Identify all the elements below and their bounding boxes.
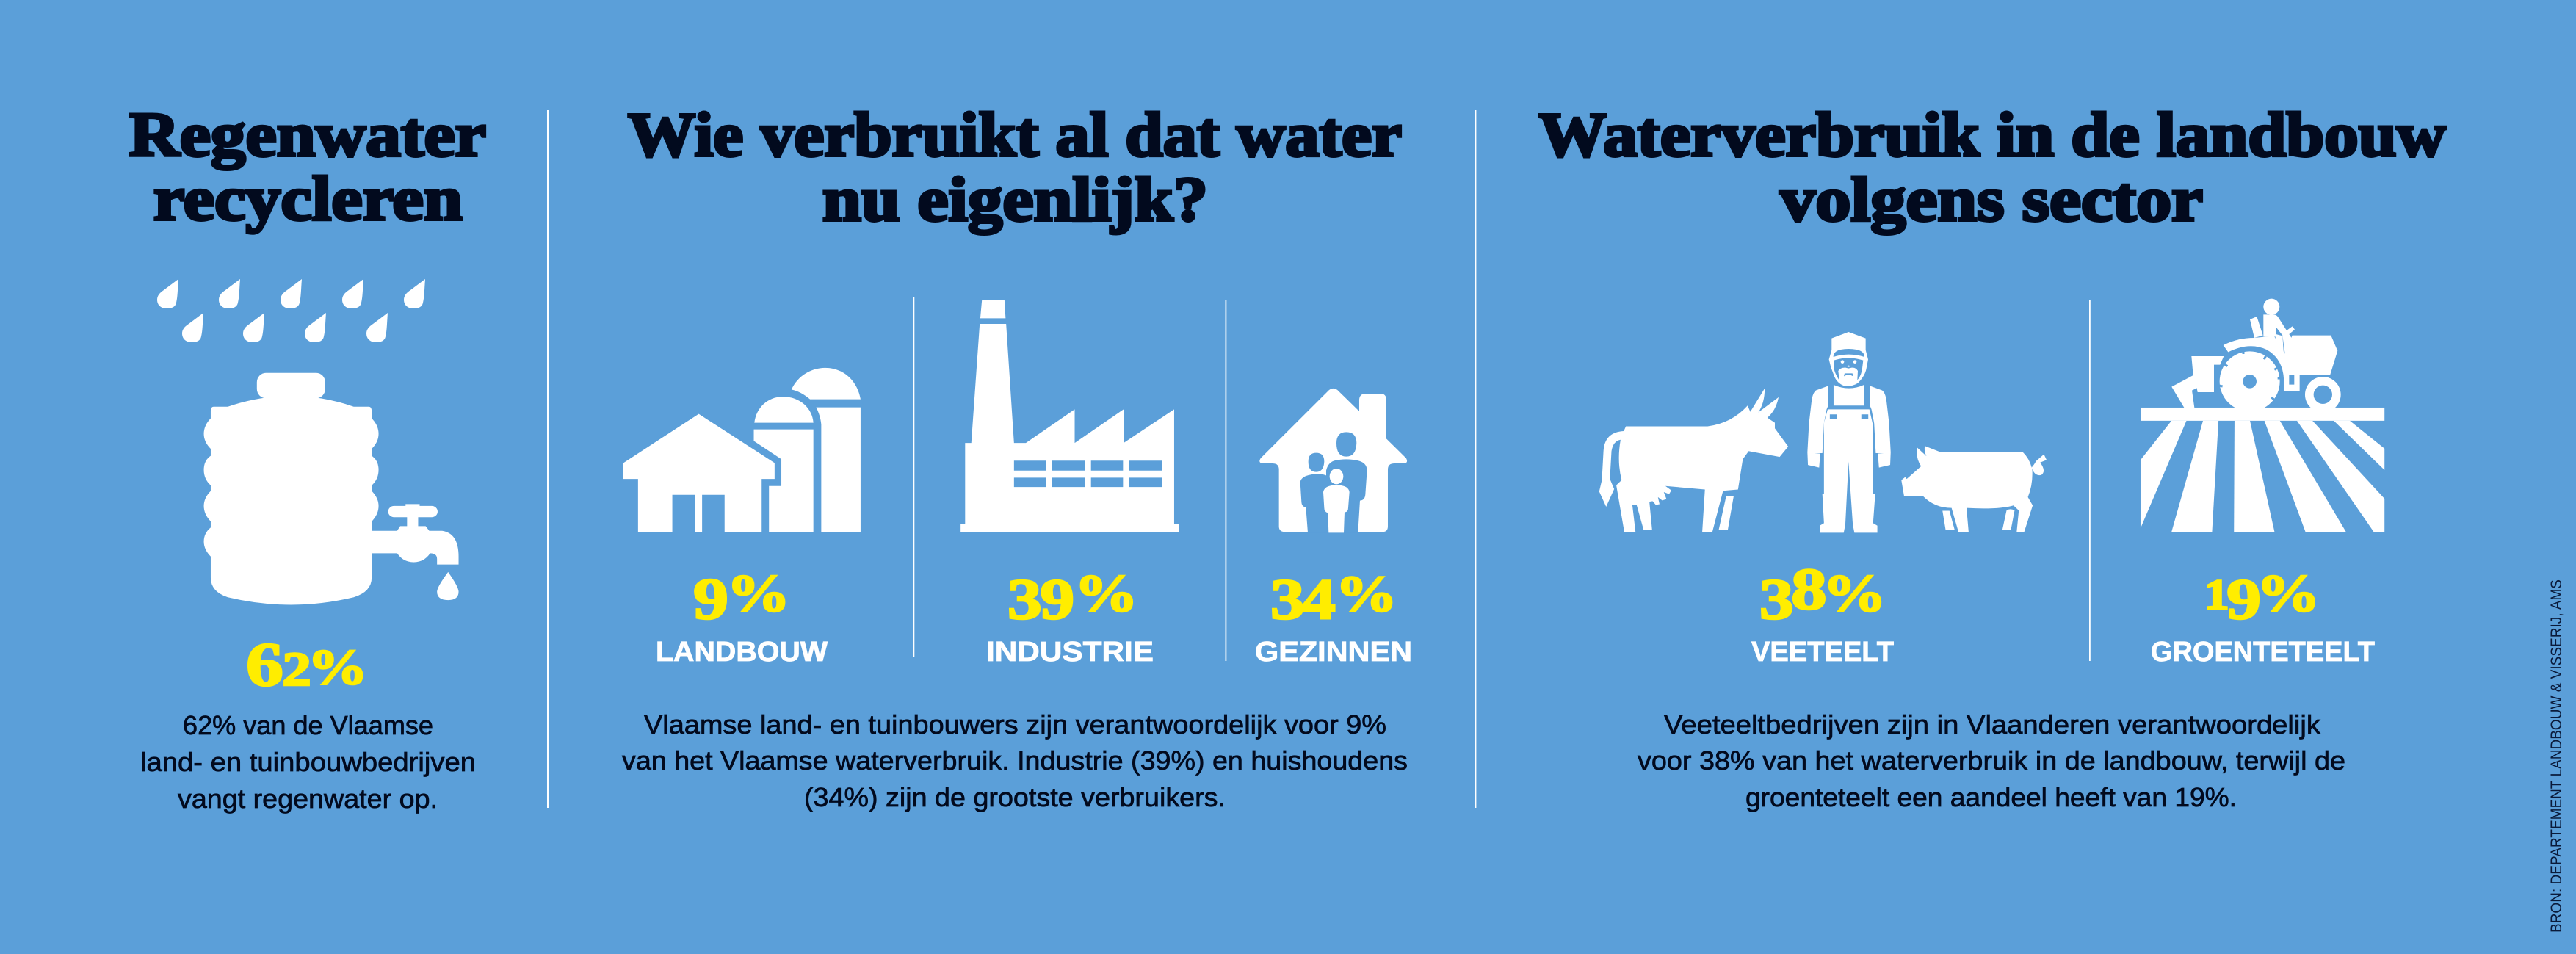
stat: 19%: 9 xyxy=(2226,567,2261,631)
stat: 38%: 8 xyxy=(1791,556,1827,622)
heading: waterverbruik in de landbouw: volgens sector xyxy=(1780,164,2203,234)
icon: farm with silos xyxy=(623,368,861,532)
heading: wie verbruikt al dat water xyxy=(628,99,1402,234)
label: gezinnen: GEZINNEN xyxy=(1255,637,1412,668)
icon: farmer xyxy=(1807,332,1891,532)
text block: verbruik description: Vlaamse land- en tuinbouwers zijn verantwoordelijk voor 9% xyxy=(644,709,1386,740)
stat: 19%: % xyxy=(2257,565,2320,623)
source note: BRON: DEPARTEMENT LANDBOUW & VISSERIJ, AMS xyxy=(2548,579,2565,933)
stat: 62%: 2 xyxy=(282,642,311,695)
heading: waterverbruik in de landbouw: Waterverbruik in de landbouw xyxy=(1538,99,2446,170)
stat: 9%: % xyxy=(727,565,790,623)
icon: factory xyxy=(960,300,1179,532)
stat: 39%: % xyxy=(1074,565,1138,623)
panel: regenwater recycleren xyxy=(129,99,486,814)
stat: 39%: 3 xyxy=(1007,567,1042,631)
icon: pig xyxy=(1901,446,2047,532)
stat: 38%: 3 xyxy=(1759,567,1794,631)
label: industrie: INDUSTRIE xyxy=(986,637,1154,668)
heading: regenwater recycleren xyxy=(129,99,486,234)
stat: 62%: 6 xyxy=(246,630,283,699)
heading: waterverbruik in de landbouw xyxy=(1538,99,2446,234)
heading: wie verbruikt al dat water: nu eigenlijk? xyxy=(822,164,1208,234)
text block: regenwater description: land- en tuinbouwbedrijven xyxy=(140,747,476,777)
text block: landbouw description: groenteteelt een aandeel heeft van 19%. xyxy=(1745,782,2237,812)
panel: wie verbruikt al dat water xyxy=(622,99,1412,812)
stat: 38%: % xyxy=(1823,565,1886,623)
icon: rain barrel with tap xyxy=(204,373,459,604)
text block: verbruik description xyxy=(622,709,1408,812)
icon: tractor on field xyxy=(2141,299,2384,532)
stat: 62%: % xyxy=(308,640,368,695)
stat: 39%: 9 xyxy=(1040,567,1074,631)
stat: 34%: % xyxy=(1336,565,1397,622)
text block: regenwater description: 62% van de Vlaamse xyxy=(183,710,433,740)
label: landbouw: LANDBOUW xyxy=(656,637,828,668)
text block: landbouw description: Veeteeltbedrijven zijn in Vlaanderen verantwoordelijk xyxy=(1664,709,2321,740)
heading: regenwater recycleren: Regenwater xyxy=(129,99,486,170)
stat: 34%: 3 xyxy=(1270,567,1305,631)
label: veeteelt: VEETEELT xyxy=(1751,637,1894,668)
text block: regenwater description xyxy=(140,710,476,814)
panel: waterverbruik in de landbouw xyxy=(1538,99,2446,812)
text block: verbruik description: van het Vlaamse waterverbruik. Industrie (39%) en huishoudens xyxy=(622,745,1408,776)
text block: verbruik description: (34%) zijn de grootste verbruikers. xyxy=(804,782,1226,812)
label: groenteteelt: GROENTETEELT xyxy=(2151,637,2375,668)
text block: landbouw description xyxy=(1638,709,2345,812)
icon: rain drops xyxy=(157,279,425,342)
heading: wie verbruikt al dat water: Wie verbruikt al dat water xyxy=(628,99,1402,170)
stat: 34%: 4 xyxy=(1301,567,1336,631)
text block: regenwater description: vangt regenwater op. xyxy=(178,784,438,814)
stat: 9%: 9 xyxy=(693,566,728,632)
icon: house with family xyxy=(1259,389,1407,532)
text block: landbouw description: voor 38% van het waterverbruik in de landbouw, terwijl de xyxy=(1638,745,2345,776)
icon: cow xyxy=(1599,389,1788,532)
stat: 19%: 1 xyxy=(2204,571,2229,618)
heading: regenwater recycleren: recycleren xyxy=(153,163,463,234)
